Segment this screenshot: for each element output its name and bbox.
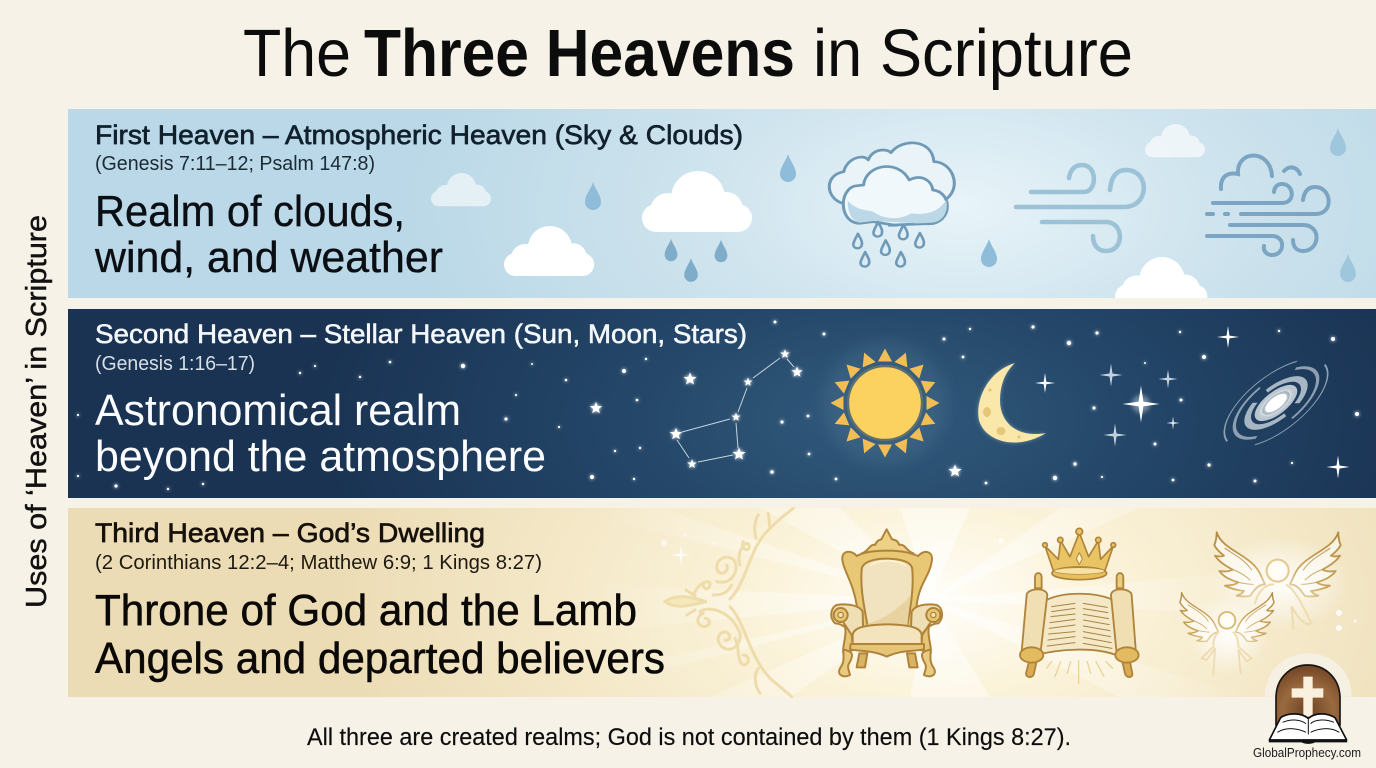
first heaven description: Realm of clouds, xyxy=(95,187,405,236)
panel: third heaven xyxy=(68,508,1376,697)
third heaven heading: Third Heaven – God’s Dwelling xyxy=(95,518,485,548)
title: in Scripture xyxy=(813,16,1133,91)
side label: uses of heaven: Uses of ‘Heaven’ in Scripture xyxy=(21,215,53,608)
icon: throne xyxy=(831,529,942,676)
logo emblem xyxy=(1265,653,1352,744)
panel: second heaven xyxy=(68,309,1376,498)
title xyxy=(243,16,1133,91)
third heaven citation: (2 Corinthians 12:2–4; Matthew 6:9; 1 Kings 8:27) xyxy=(95,552,542,574)
constellation xyxy=(670,349,803,468)
second heaven description: Astronomical realm xyxy=(95,386,461,435)
icon: spiral galaxy xyxy=(1210,343,1342,463)
icon: angels xyxy=(1180,532,1350,675)
third heaven description: Throne of God and the Lamb xyxy=(95,586,637,635)
first heaven citation: (Genesis 7:11–12; Psalm 147:8) xyxy=(95,153,375,175)
icon: crescent moon xyxy=(978,363,1046,443)
icon: scroll xyxy=(1020,573,1139,683)
icon: crown xyxy=(1043,528,1116,580)
sparkles xyxy=(661,534,1356,631)
second heaven citation: (Genesis 1:16–17) xyxy=(95,353,255,375)
white clouds xyxy=(431,124,1207,308)
first heaven heading: First Heaven – Atmospheric Heaven (Sky & Clouds) xyxy=(95,120,743,150)
second heaven heading: Second Heaven – Stellar Heaven (Sun, Moon, Stars) xyxy=(95,319,747,349)
raindrops xyxy=(585,128,1356,282)
icon: sparkling stars xyxy=(1035,326,1350,478)
icon: wind xyxy=(1016,165,1144,251)
logo: GlobalProphecy.com xyxy=(1253,653,1361,760)
icon: rain cloud xyxy=(829,143,954,267)
panel: first heaven xyxy=(68,109,1376,308)
first heaven description xyxy=(94,187,443,282)
first heaven description: wind, and weather xyxy=(94,233,443,282)
third heaven description xyxy=(95,586,665,683)
third heaven description: Angels and departed believers xyxy=(95,634,665,683)
icon: storm wind xyxy=(1207,156,1329,255)
scattered stars xyxy=(77,320,1359,490)
ornament: flourish xyxy=(665,508,793,697)
second heaven description xyxy=(95,386,546,481)
title: The xyxy=(243,16,351,91)
light rays xyxy=(698,508,1162,697)
logo text: GlobalProphecy.com xyxy=(1253,746,1361,760)
footer note: All three are created realms; God is not contained by them (1 Kings 8:27). xyxy=(307,724,1071,751)
second heaven description: beyond the atmosphere xyxy=(95,432,546,481)
icon: sun xyxy=(823,341,947,465)
title: Three Heavens xyxy=(364,16,795,91)
